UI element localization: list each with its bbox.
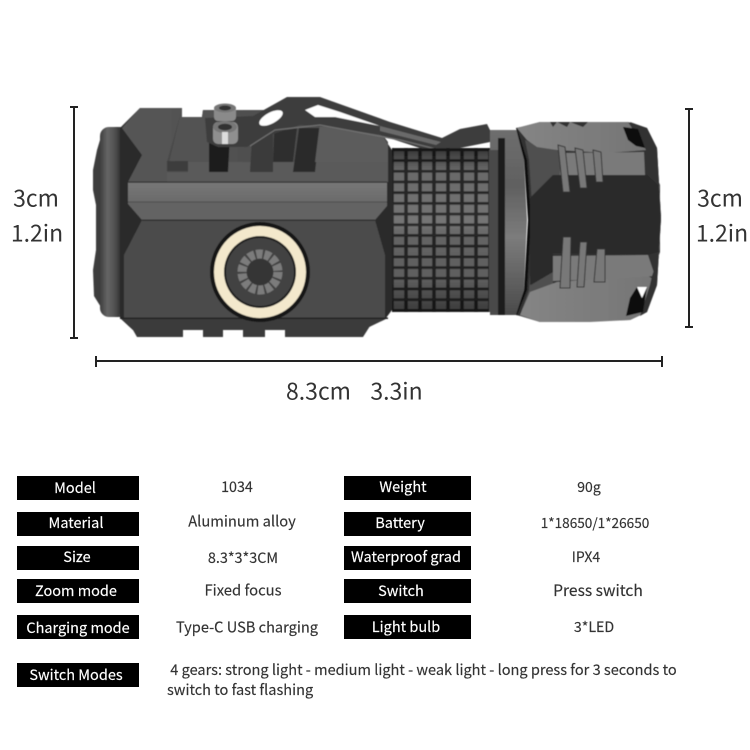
spec: weight xyxy=(344,476,471,500)
tail cap xyxy=(517,122,661,322)
upper grooves xyxy=(558,145,603,192)
flashlight xyxy=(93,97,661,337)
spec: zoom mode xyxy=(17,579,139,603)
spec: material xyxy=(17,512,139,536)
spec: switch modes xyxy=(17,663,139,687)
clip screws xyxy=(213,104,238,144)
spec: switch xyxy=(344,579,471,603)
width dimension label: 8.3cm xyxy=(286,372,351,406)
value: switch modes description: 4 gears: strong light - medium light - weak light - long press for 3 seconds to xyxy=(170,659,677,680)
spec: light bulb xyxy=(344,615,471,639)
power button xyxy=(210,222,310,322)
value: material: Aluminum alloy xyxy=(188,511,296,532)
spec: weight: Weight xyxy=(379,476,427,497)
left height dimension line xyxy=(70,107,78,338)
spec: zoom mode: Zoom mode xyxy=(35,579,117,600)
spec: model: Model xyxy=(54,476,96,497)
lower grooves xyxy=(560,237,605,288)
value: model: 1034 xyxy=(221,476,253,497)
flat dark face xyxy=(530,175,661,285)
spec: size xyxy=(17,546,139,570)
left dimension label xyxy=(11,180,63,248)
value: switch modes description xyxy=(167,659,677,700)
width dimension line xyxy=(96,356,662,367)
lanyard slots xyxy=(623,127,645,148)
spec: model xyxy=(17,476,139,500)
right dimension label: 1.2in xyxy=(696,214,748,248)
pocket clip xyxy=(205,97,491,153)
width dimension label xyxy=(286,372,423,406)
spec: size: Size xyxy=(63,546,91,567)
value: waterproof grade: IPX4 xyxy=(572,547,600,567)
spec: battery xyxy=(344,512,471,536)
lower light band xyxy=(520,275,657,322)
value: weight: 90g xyxy=(577,477,601,497)
value: battery: 1*18650/1*26650 xyxy=(541,512,649,532)
left dimension label: 3cm xyxy=(13,180,59,214)
right height dimension line xyxy=(685,109,693,327)
value: light bulb: 3*LED xyxy=(574,617,614,637)
right dimension label xyxy=(696,180,748,248)
spec: switch: Switch xyxy=(378,579,424,600)
front bezel xyxy=(93,127,122,317)
right dimension label: 3cm xyxy=(697,180,743,214)
value: switch: Press switch xyxy=(553,579,643,601)
spec: charging mode: Charging mode xyxy=(26,616,130,637)
spec: light bulb: Light bulb xyxy=(372,615,440,636)
left dimension label: 1.2in xyxy=(11,214,63,248)
spec: switch modes: Switch Modes xyxy=(29,663,123,684)
spec: waterproof grade: Waterproof grad xyxy=(351,546,461,567)
collar xyxy=(489,127,533,316)
upper light band xyxy=(517,122,647,153)
value: charging mode: Type-C USB charging xyxy=(176,617,318,638)
main body xyxy=(120,108,392,337)
value: size: 8.3*3*3CM xyxy=(208,547,278,568)
knurled grip xyxy=(392,148,490,312)
value: switch modes description: switch to fast flashing xyxy=(167,678,313,700)
width dimension label: 3.3in xyxy=(370,372,423,406)
spec: material: Material xyxy=(49,511,103,532)
spec: battery: Battery xyxy=(375,511,425,532)
value: zoom mode: Fixed focus xyxy=(204,580,282,601)
